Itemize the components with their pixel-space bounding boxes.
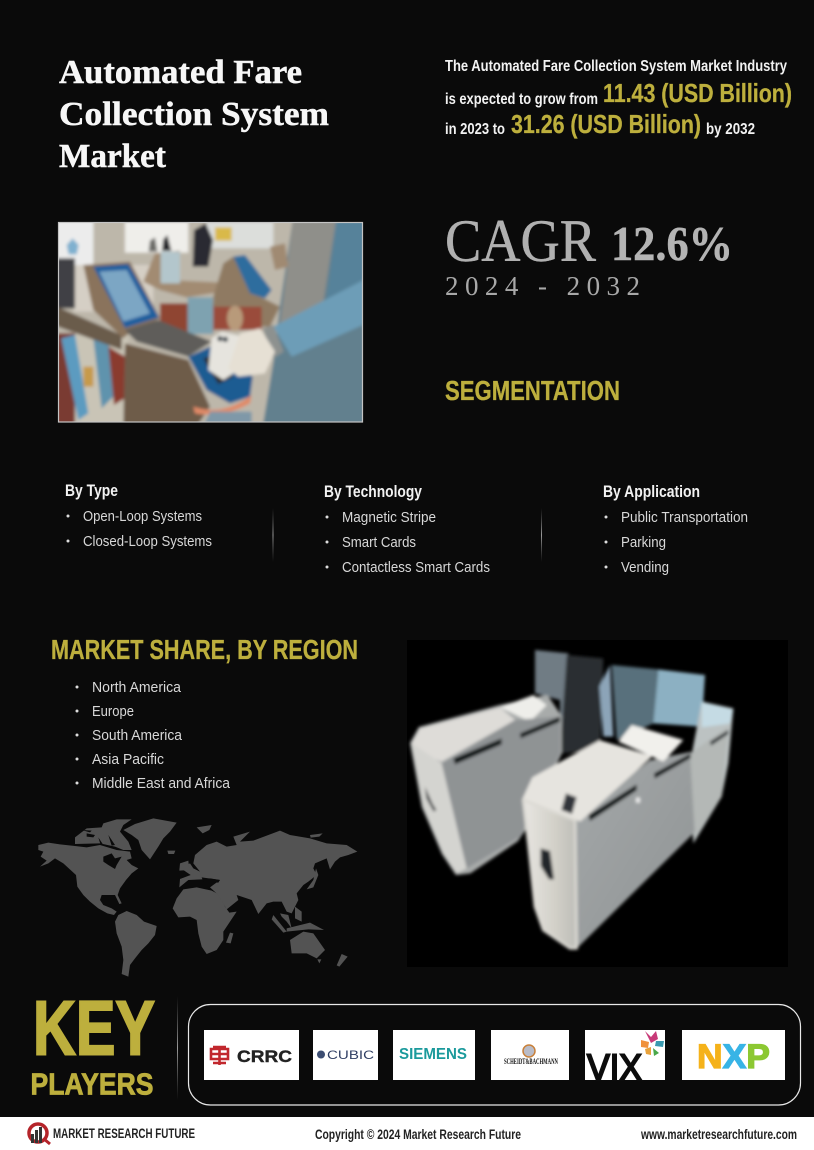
title: Market — [59, 138, 167, 175]
heading: market share by region: MARKET SHARE, BY REGION — [51, 634, 358, 665]
key players panel — [188, 1004, 800, 1105]
logo: CRRC — [204, 1030, 299, 1080]
key players heading: PLAYERS — [30, 1066, 154, 1102]
logo: Siemens: SIEMENS — [399, 1046, 467, 1063]
segment: by type: By Type — [65, 481, 118, 500]
segment: by technology: Contactless Smart Cards — [342, 559, 490, 576]
segment: by technology: Magnetic Stripe — [342, 509, 436, 526]
segment: by application: Parking — [621, 534, 666, 551]
logo: CRRC: CRRC — [237, 1047, 292, 1066]
logo: VIX: VIX — [587, 1047, 642, 1088]
logo: Siemens — [393, 1030, 475, 1080]
segment: by type — [65, 481, 212, 550]
market growth summary: 31.26 (USD Billion) — [511, 109, 701, 139]
title — [59, 54, 329, 175]
key players heading — [30, 986, 155, 1102]
logo: NXP: NXP — [697, 1038, 770, 1076]
market growth summary: is expected to grow from — [445, 91, 598, 108]
title: Collection System — [59, 96, 329, 133]
CAGR figure: CAGR — [445, 208, 596, 274]
photo: fare gate turnstiles — [407, 640, 788, 967]
footer copyright: Copyright © 2024 Market Research Future — [315, 1127, 521, 1142]
region list: Asia Pacific — [92, 751, 164, 768]
footer brand name: MARKET RESEARCH FUTURE — [53, 1126, 195, 1141]
title: Automated Fare — [59, 54, 302, 91]
segment: by application: Vending — [621, 559, 669, 576]
logo: Cubic: CUBIC — [327, 1048, 374, 1062]
logo: VIX — [585, 1030, 665, 1088]
CAGR figure: 12.6% — [611, 216, 733, 271]
segment: by type: Closed-Loop Systems — [83, 533, 212, 550]
logo: Scheidt & Bachmann: SCHEIDT&BACHMANN — [504, 1057, 558, 1066]
market growth summary — [445, 58, 792, 139]
logo: Cubic — [313, 1030, 378, 1080]
icon: market research future logo — [29, 1124, 50, 1144]
world map — [38, 818, 358, 976]
heading: segmentation: SEGMENTATION — [445, 375, 620, 406]
region list: Europe — [92, 703, 134, 720]
market growth summary: by 2032 — [706, 121, 755, 138]
segment: by application: Public Transportation — [621, 509, 748, 526]
footer — [0, 1117, 814, 1150]
logo: NXP — [682, 1030, 785, 1080]
key players heading: KEY — [33, 986, 155, 1072]
logo: Scheidt & Bachmann — [491, 1030, 569, 1080]
CAGR figure — [445, 208, 733, 301]
CAGR figure: 2024 - 2032 — [445, 271, 640, 301]
segment: by technology — [324, 482, 490, 576]
segment: by technology: Smart Cards — [342, 534, 416, 551]
region list: South America — [92, 727, 183, 744]
photo: contactless fare gate — [53, 217, 367, 427]
segment: by application — [603, 482, 748, 576]
segment: by application: By Application — [603, 482, 700, 501]
segment: by type: Open-Loop Systems — [83, 508, 202, 525]
region list — [76, 679, 231, 792]
market growth summary: in 2023 to — [445, 121, 505, 138]
segment: by technology: By Technology — [324, 482, 422, 501]
region list: Middle East and Africa — [92, 775, 231, 792]
region list: North America — [92, 679, 182, 696]
